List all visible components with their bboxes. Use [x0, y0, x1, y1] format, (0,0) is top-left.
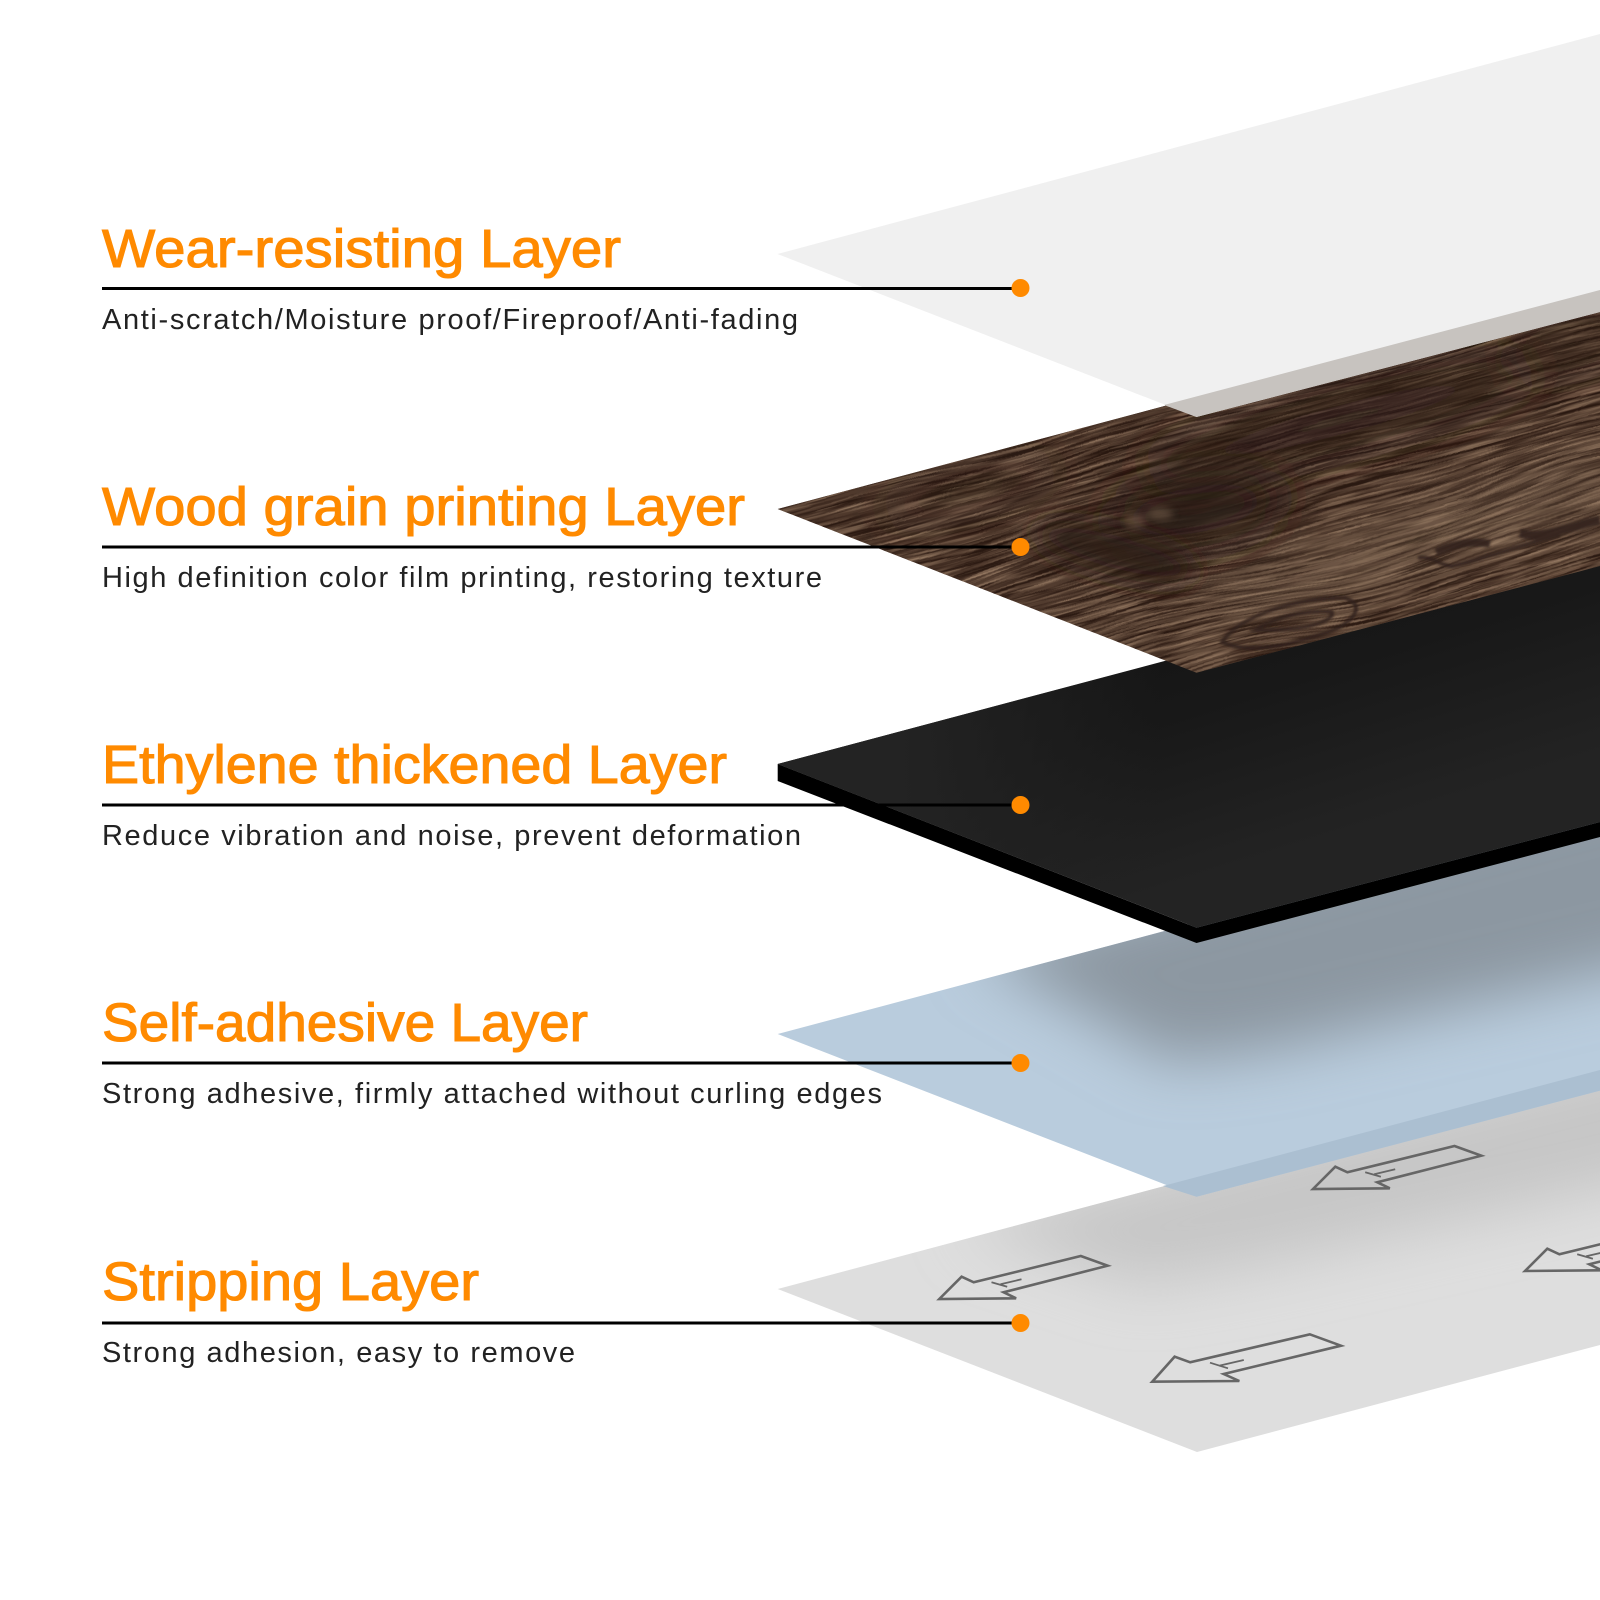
callout: stripping — [102, 1252, 1030, 1369]
dot — [1012, 1054, 1030, 1072]
layer: self-adhesive sheet — [778, 822, 1600, 1197]
icon: arrow right cropped — [1525, 1228, 1600, 1271]
callout: wear-resisting — [102, 219, 1030, 336]
description: Strong adhesion, easy to remove — [102, 1337, 575, 1369]
heading: Wood grain printing Layer — [102, 477, 745, 537]
icon: arrow upper — [1313, 1146, 1481, 1189]
layer: wood grain print — [778, 312, 1600, 673]
icon: arrow left — [939, 1256, 1108, 1299]
description: Anti-scratch/Moisture proof/Fireproof/Anti-fading — [102, 304, 798, 336]
dot — [1012, 796, 1030, 814]
dot — [1012, 1314, 1030, 1332]
description: Strong adhesive, firmly attached without curling edges — [102, 1078, 882, 1110]
heading: Wear-resisting Layer — [102, 219, 621, 279]
icon: arrow lower — [1152, 1334, 1341, 1382]
wood dark patches — [869, 303, 1600, 597]
layer: ethylene thickened board — [778, 545, 1600, 943]
description: Reduce vibration and noise, prevent deformation — [102, 820, 801, 852]
heading: Self-adhesive Layer — [102, 993, 588, 1053]
heading: Stripping Layer — [102, 1252, 479, 1312]
callout: self-adhesive — [102, 993, 1030, 1110]
film overlap strip — [1164, 290, 1600, 417]
wood knot marks — [1222, 520, 1600, 648]
heading: Ethylene thickened Layer — [102, 735, 727, 795]
callout: ethylene — [102, 735, 1030, 852]
callout: wood grain — [102, 477, 1030, 594]
wood grain texture — [778, 312, 1600, 672]
wood light streak — [1180, 440, 1600, 620]
wood knot highlights — [1124, 508, 1173, 528]
layer: wear-resisting film — [778, 34, 1600, 417]
layer: stripping sheet — [778, 1090, 1600, 1452]
description: High definition color film printing, restoring texture — [102, 562, 822, 594]
dot — [1012, 279, 1030, 297]
dot — [1012, 538, 1030, 556]
